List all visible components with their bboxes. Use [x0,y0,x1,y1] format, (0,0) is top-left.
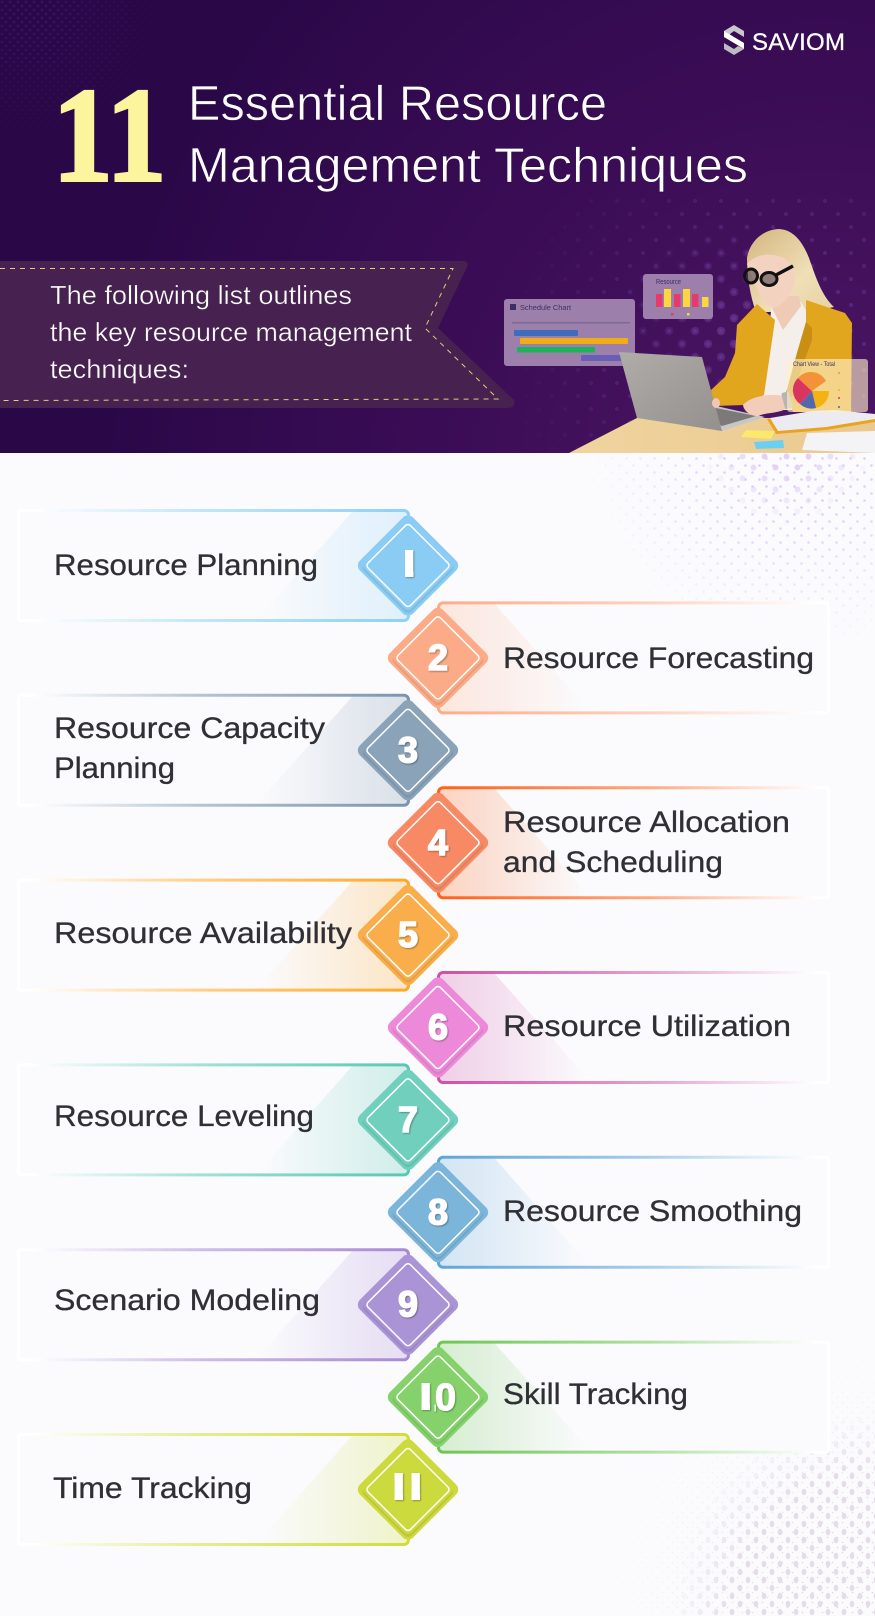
card 1: Resource Planning [18,510,461,620]
card 10: Skill Tracking: 0 [435,1377,456,1419]
card 3: Resource Capacity Planning [18,695,461,805]
face [747,255,795,308]
card 9: Scenario Modeling [18,1250,461,1360]
banner: intro text: The following list outlines [50,280,352,310]
card 9: Scenario Modeling: Scenario Modeling [54,1284,320,1317]
neck [772,296,801,330]
glasses [744,266,793,286]
panel: schedule chart [504,299,635,366]
logo: Saviom [724,25,845,56]
card 10: Skill Tracking [385,1342,828,1452]
title: 11 [52,62,166,210]
card 11: Time Tracking [18,1434,461,1544]
card 4: Resource Allocation and Scheduling: Resource Allocation [503,806,790,839]
panel: schedule chart: Schedule Chart [520,303,572,312]
logo: Saviom: SAVIOM [752,29,845,56]
card 1: Resource Planning: 1 [398,544,419,586]
panel: chart view [787,359,868,412]
hair [747,229,834,312]
card 2: Resource Forecasting [385,603,828,713]
title: Management Techniques [188,139,748,193]
jacket [711,304,775,406]
card 1: Resource Planning: Resource Planning [54,549,318,582]
card 2: Resource Forecasting: Resource Forecasting [503,642,814,675]
card 6: Resource Utilization [385,972,828,1082]
table [569,418,875,453]
card 6: Resource Utilization: Resource Utilization [503,1010,791,1043]
card 4: Resource Allocation and Scheduling: 4 [428,822,448,863]
panel: resource chart [643,274,713,319]
card 8: Resource Smoothing [385,1157,828,1267]
background dots: upper right [612,454,873,628]
panel: chart view: Chart View - Total [793,362,835,368]
card 8: Resource Smoothing: 8 [428,1192,448,1232]
card 10: Skill Tracking: 1 [414,1377,435,1419]
card 3: Resource Capacity Planning: Planning [54,752,175,785]
card 5: Resource Availability: 5 [398,914,418,955]
card 5: Resource Availability: Resource Availability [54,917,352,950]
card 11: Time Tracking: 1 [387,1467,408,1509]
card 9: Scenario Modeling: 9 [398,1284,418,1324]
title [52,62,748,210]
sticky notes and papers [741,430,775,439]
notebook [767,413,875,434]
card 4: Resource Allocation and Scheduling: and Scheduling [503,846,723,879]
banner: intro text: the key resource management [50,317,413,347]
illustration: woman at laptop [569,229,875,453]
card 2: Resource Forecasting: 2 [428,637,448,678]
card 7: Resource Leveling: 7 [398,1099,418,1140]
card 7: Resource Leveling: Resource Leveling [54,1100,314,1133]
card 7: Resource Leveling [18,1065,461,1175]
panel: resource chart: Resource [656,279,681,286]
hands and watch [743,395,790,416]
card 5: Resource Availability [18,880,461,990]
shirt [745,302,812,410]
card 4: Resource Allocation and Scheduling [385,788,828,898]
banner: intro text [0,261,514,408]
card 10: Skill Tracking: Skill Tracking [503,1378,688,1411]
card 11: Time Tracking: Time Tracking [53,1472,252,1505]
card 11: Time Tracking: 1 [404,1467,425,1509]
card 8: Resource Smoothing: Resource Smoothing [503,1195,802,1228]
banner: intro text: techniques: [50,354,189,384]
card 3: Resource Capacity Planning: Resource Capacity [54,712,325,745]
laptop [660,406,765,431]
card 3: Resource Capacity Planning: 3 [398,730,418,770]
title: Essential Resource [188,77,607,131]
header panel [0,0,875,453]
background dots: lower right [652,1392,875,1616]
card 6: Resource Utilization: 6 [428,1006,448,1048]
